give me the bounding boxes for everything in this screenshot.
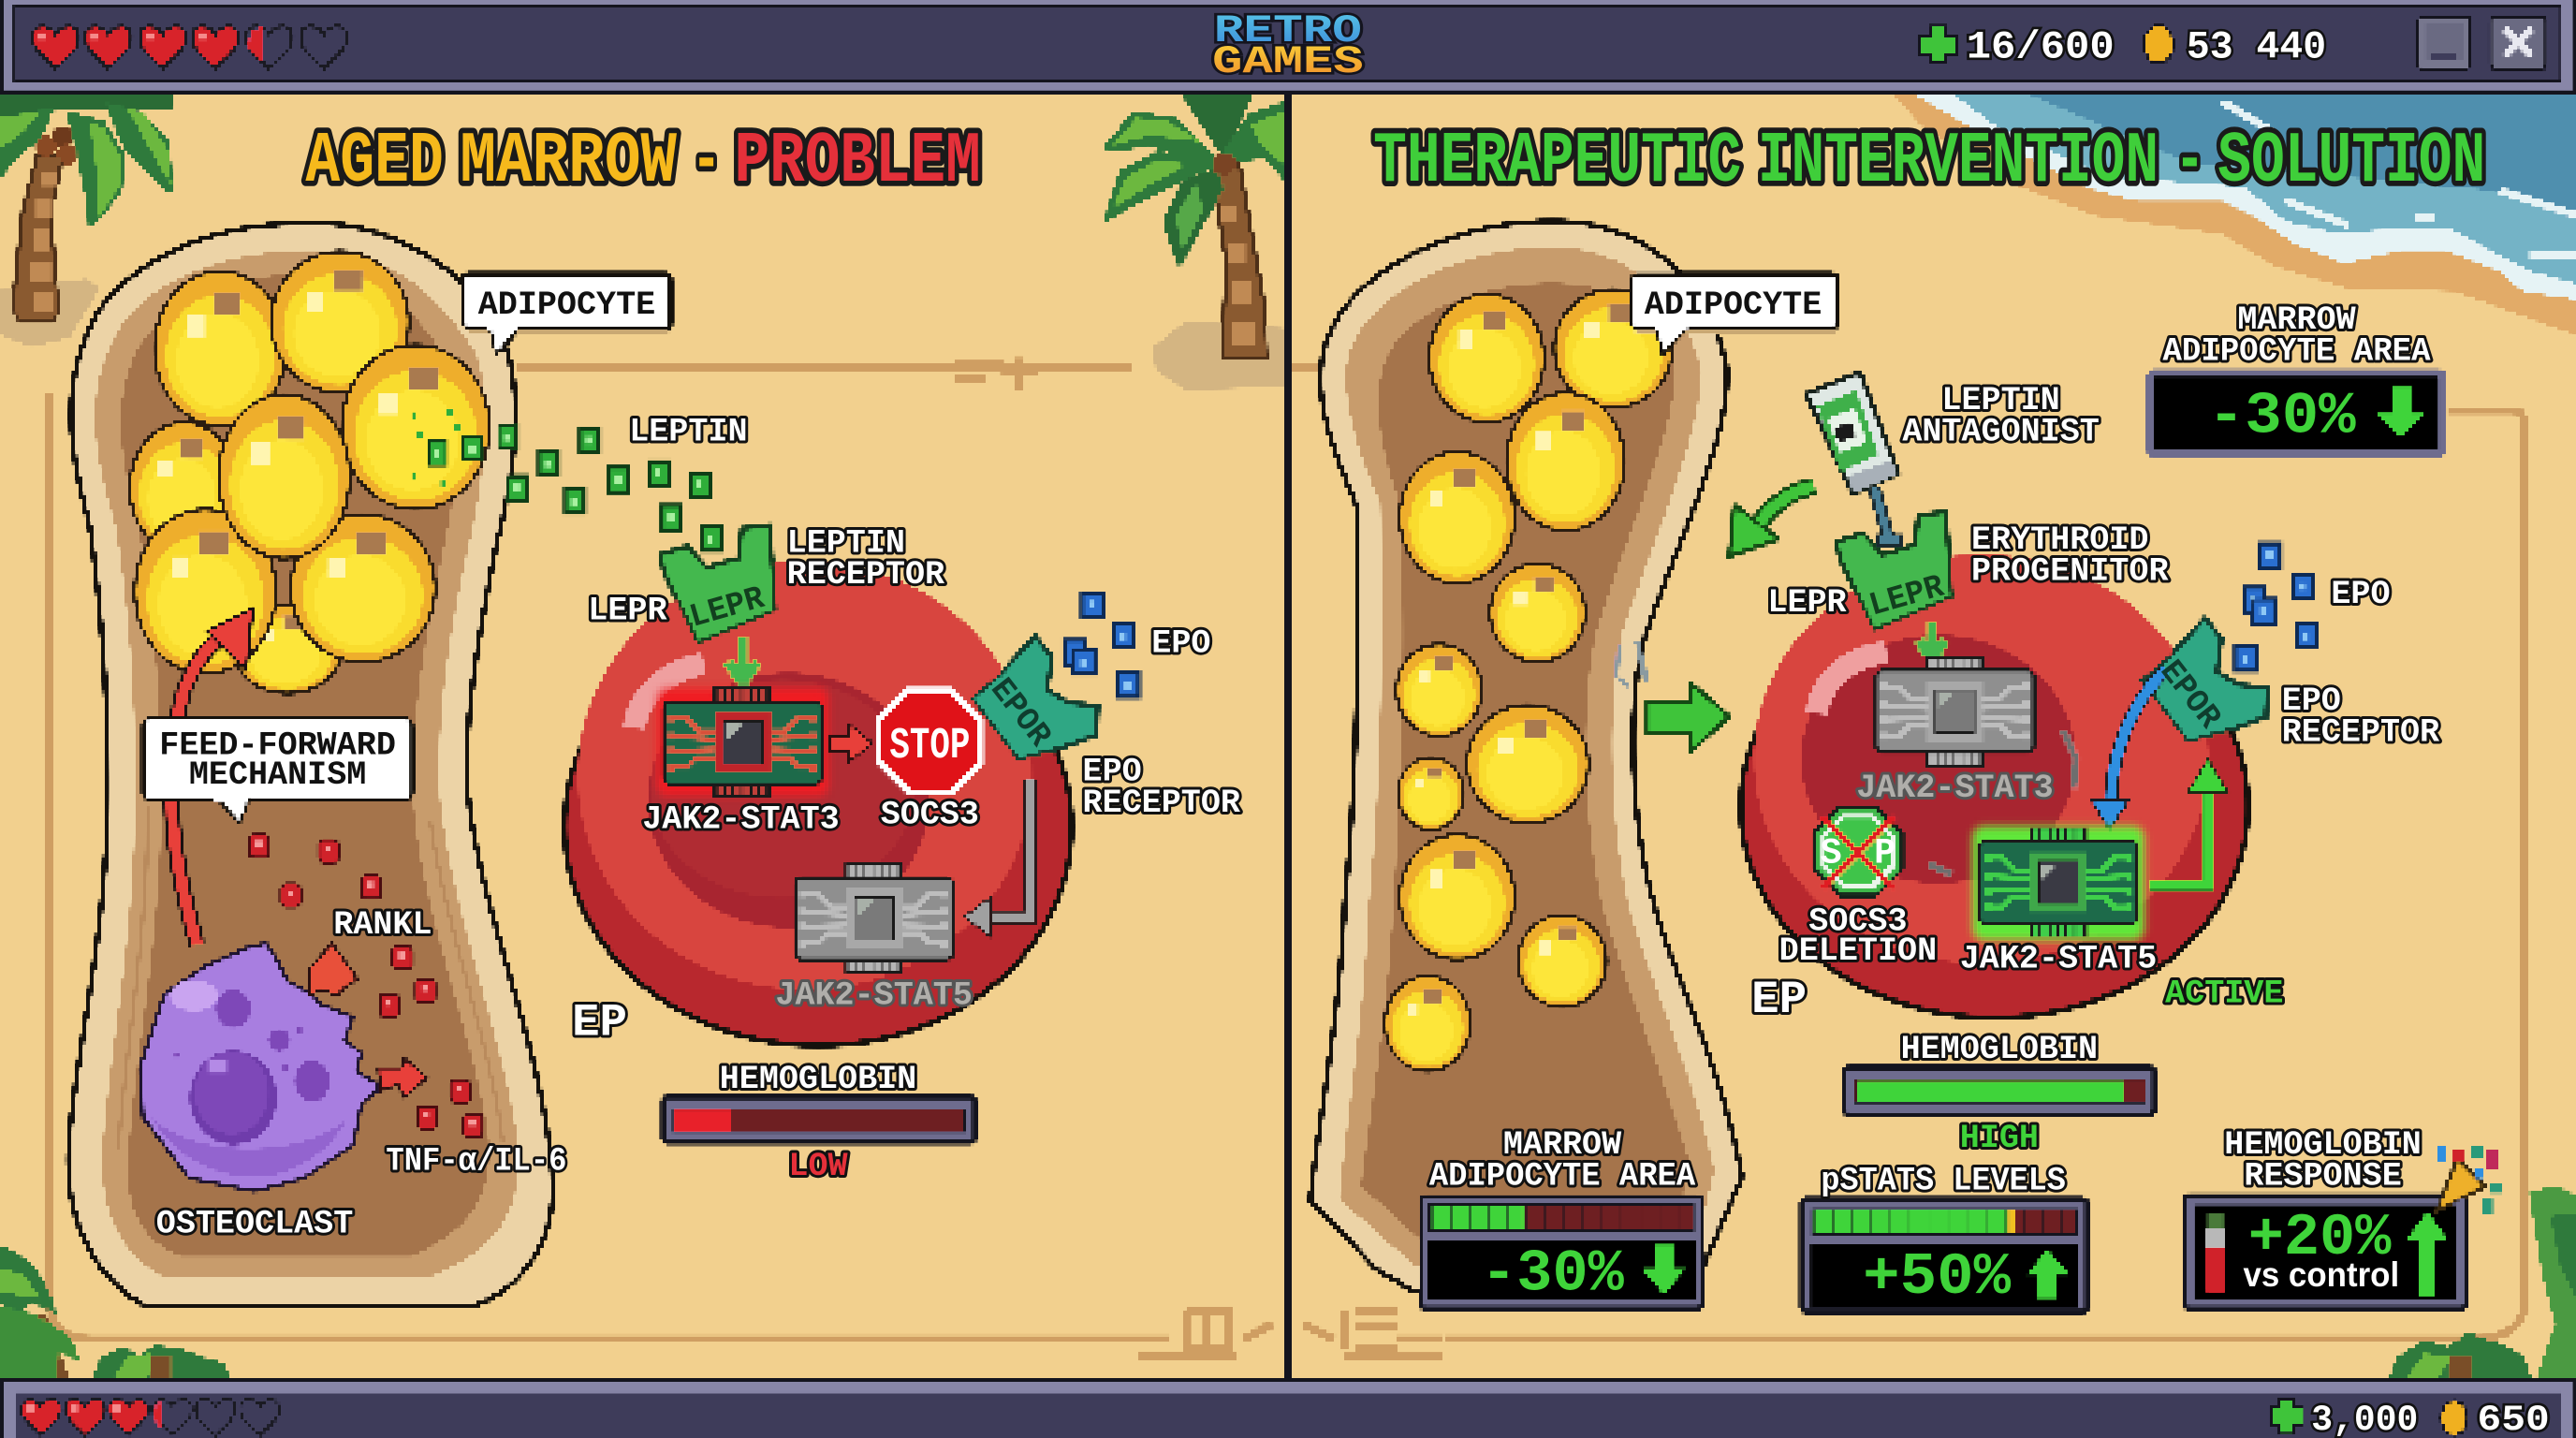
label: feed-forward mechanism: MECHANISM	[189, 756, 366, 794]
value: vs control: vs control	[2243, 1255, 2399, 1294]
label: pstats: pSTATS LEVELS	[1821, 1163, 2066, 1200]
leptin particles	[411, 407, 721, 550]
bottom status bar	[0, 1378, 2576, 1438]
label: leptin antagonist: LEPTIN	[1941, 382, 2060, 419]
receptor text: LEPR	[685, 580, 769, 637]
leptin receptor	[1837, 513, 1952, 629]
title: aged marrow problem: MARROW	[460, 122, 678, 203]
marrow cavity	[68, 224, 552, 1306]
hemoglobin bar low	[664, 1097, 974, 1142]
label: adipocyte: ADIPOCYTE	[478, 286, 655, 324]
arrow: receptor to chip	[727, 638, 757, 683]
arrow: curved green	[1730, 486, 1814, 555]
sign letters: S P	[1821, 832, 1895, 873]
red active chip JAK2-STAT3	[657, 688, 828, 797]
adipocytes shrunken	[1384, 289, 1673, 1071]
red blood cell left	[565, 562, 1071, 1045]
label: lepr: LEPR	[588, 593, 667, 630]
label: ep: EP	[572, 997, 627, 1049]
SOCS3 deletion sign	[1814, 807, 1902, 895]
label: socs3 deletion: DELETION	[1779, 932, 1937, 970]
broken grey link	[1928, 731, 2076, 874]
beach water	[1895, 95, 2576, 333]
label: jak2-stat5 grey: JAK2-STAT5	[775, 976, 973, 1014]
icon: green plus	[2272, 1400, 2304, 1434]
title: aged marrow problem	[305, 122, 981, 203]
label: osteoclast: OSTEOCLAST	[156, 1205, 353, 1242]
bar frame	[0, 1378, 2576, 1438]
label: epo receptor: RECEPTOR	[1083, 785, 1241, 822]
green arrow up	[2150, 759, 2228, 886]
label: leptin antagonist	[1902, 382, 2100, 450]
label: hemoglobin response: HEMOGLOBIN	[2224, 1126, 2422, 1164]
button minimize	[2418, 17, 2471, 69]
label: marrow adipocyte area bottom: MARROW	[1503, 1126, 1622, 1164]
arrow: marrow to cell	[1647, 685, 1728, 749]
logo retro games: GAMES	[1212, 39, 1364, 84]
value: +20: +20%	[2248, 1204, 2391, 1271]
icon: green plus	[1921, 26, 1956, 63]
value: -30: -30%	[1481, 1240, 1624, 1308]
value: +50: +50%	[1863, 1243, 2011, 1311]
arrow: RANKL release	[309, 943, 359, 996]
hearts	[22, 1400, 279, 1436]
osteoclast cell	[139, 943, 381, 1191]
label: leptin receptor: LEPTIN	[787, 525, 905, 563]
red blood cell right	[1741, 555, 2247, 1017]
label: epo receptor: EPO	[1083, 754, 1142, 791]
label: marrow adipocyte area bottom	[1429, 1126, 1696, 1195]
EPO particles	[2236, 544, 2317, 670]
label: feed-forward mechanism: FEED-FORWARD	[159, 727, 396, 765]
label: hemoglobin response: RESPONSE	[2244, 1157, 2402, 1195]
label: erythroid progenitor	[1971, 521, 2169, 591]
hearts	[33, 26, 346, 69]
counter: health: 16/600	[1967, 24, 2115, 69]
arrow: TNF release	[378, 1058, 427, 1097]
label: marrow adipocyte area bottom: ADIPOCYTE AREA	[1429, 1157, 1696, 1195]
label: lepr: LEPR	[1767, 584, 1848, 622]
stat box: marrow adipocyte area	[1421, 1196, 1702, 1308]
label: marrow adipocyte area: ADIPOCYTE AREA	[2162, 332, 2431, 370]
stat box: hemoglobin response	[2185, 1196, 2466, 1308]
label: leptin antagonist: ANTAGONIST	[1902, 413, 2100, 450]
title: aged marrow problem: PROBLEM	[734, 122, 981, 203]
callout: adipocyte	[463, 274, 670, 355]
label: socs3 deletion	[1779, 902, 1937, 970]
label: active: ACTIVE	[2165, 976, 2283, 1013]
adipocytes cluster	[130, 252, 490, 694]
callout: feed-forward mechanism	[143, 718, 413, 823]
label: jak2-stat3 grey: JAK2-STAT3	[1856, 770, 2054, 807]
logo retro games	[1212, 8, 1364, 84]
label: epo receptor: RECEPTOR	[2282, 714, 2440, 752]
label: erythroid progenitor: PROGENITOR	[1971, 553, 2169, 591]
label: hemoglobin: HEMOGLOBIN	[720, 1061, 916, 1098]
label: feed-forward mechanism	[159, 727, 396, 794]
label: high: HIGH	[1960, 1120, 2039, 1157]
stat box: pSTATS levels	[1802, 1199, 2086, 1311]
top status bar	[0, 0, 2576, 95]
label: leptin receptor	[787, 525, 945, 594]
label: tnf: TNF-α/IL-6	[386, 1143, 566, 1181]
red feed-forward arrow	[171, 608, 253, 945]
hemoglobin bar high	[1845, 1068, 2154, 1114]
palm top right	[1104, 95, 1288, 359]
grey inactive chip JAK2-STAT5	[795, 864, 953, 973]
callout: adipocyte	[1632, 274, 1837, 355]
grey inactive chip JAK2-STAT3	[1876, 657, 2034, 766]
label: hemoglobin: HEMOGLOBIN	[1901, 1031, 2098, 1068]
label: marrow adipocyte area: MARROW	[2237, 301, 2357, 339]
panel: therapeutic intervention solution	[1310, 122, 2500, 1311]
logo retro games: RETRO	[1214, 8, 1362, 53]
receptor text: LEPR	[1866, 568, 1949, 625]
label: epo receptor	[2282, 682, 2440, 752]
receptor text: EPOR	[982, 671, 1059, 755]
palm bottom right	[2389, 1186, 2576, 1380]
arrow: receptor down	[1919, 621, 1945, 661]
title: therapeutic intervention solution: INTERVENTION	[1758, 122, 2159, 203]
cytokine dots	[250, 835, 483, 1137]
label: marrow adipocyte area	[2162, 301, 2431, 370]
label: adipocyte: ADIPOCYTE	[1645, 286, 1822, 324]
marrow cavity	[1310, 222, 1741, 1290]
label: low: LOW	[788, 1148, 849, 1185]
counter: coins: 53 440	[2187, 24, 2326, 69]
receptor text: EPOR	[2152, 653, 2229, 737]
title: therapeutic intervention solution: SOLUTION	[2217, 122, 2485, 203]
grey inactive arrow	[964, 781, 1030, 936]
label: epo receptor: EPO	[2282, 682, 2341, 720]
stop text: STOP	[889, 722, 970, 771]
icon: coin	[2144, 25, 2174, 64]
bar frame	[0, 0, 2576, 95]
label: jak2-stat5: JAK2-STAT5	[1960, 941, 2157, 978]
button close	[2491, 17, 2546, 69]
icon: coin	[2441, 1401, 2467, 1435]
title: aged marrow problem: AGED	[305, 122, 444, 203]
label: rankl: RANKL	[333, 906, 432, 944]
palm bottom left	[0, 1245, 230, 1380]
label: leptin receptor: RECEPTOR	[787, 556, 945, 594]
title: aged marrow problem: -	[692, 122, 721, 203]
title: therapeutic intervention solution: THERAPEUTIC	[1373, 122, 1741, 203]
label: epo: EPO	[2331, 576, 2391, 613]
EPO particles	[1064, 594, 1138, 697]
leptin antagonist vial	[1807, 373, 1901, 546]
icon: party popper	[2437, 1147, 2500, 1212]
EPO receptor	[973, 638, 1097, 759]
palm top left	[0, 95, 174, 322]
label: socs3 deletion: SOCS3	[1808, 902, 1908, 940]
label: jak2-stat3: JAK2-STAT3	[642, 801, 840, 839]
label: leptin: LEPTIN	[629, 413, 748, 450]
label: epo receptor	[1083, 754, 1241, 822]
green active chip JAK2-STAT5	[1973, 827, 2144, 940]
title: therapeutic intervention solution	[1373, 122, 2485, 203]
blue arrow	[2091, 670, 2165, 829]
SOCS3 stop sign	[879, 690, 981, 792]
center divider	[1284, 94, 1292, 1382]
decorative frame lines	[50, 359, 2525, 1357]
small broken marker	[1617, 640, 1647, 687]
label: erythroid progenitor: ERYTHROID	[1971, 521, 2148, 559]
title: therapeutic intervention solution: -	[2175, 122, 2204, 203]
panel: aged marrow problem	[68, 122, 1241, 1306]
label: ep: EP	[1751, 974, 1807, 1026]
arrow: chip to stop	[829, 725, 872, 762]
label: epo: EPO	[1151, 625, 1210, 663]
stat box: adipocyte top	[2150, 373, 2443, 453]
value: -30 top: -30%	[2208, 383, 2356, 450]
label: socs3: SOCS3	[881, 796, 979, 833]
label: hemoglobin response	[2224, 1126, 2422, 1195]
shadows of palms	[0, 279, 1284, 389]
EPO receptor	[2143, 620, 2267, 741]
leptin receptor	[661, 526, 775, 642]
